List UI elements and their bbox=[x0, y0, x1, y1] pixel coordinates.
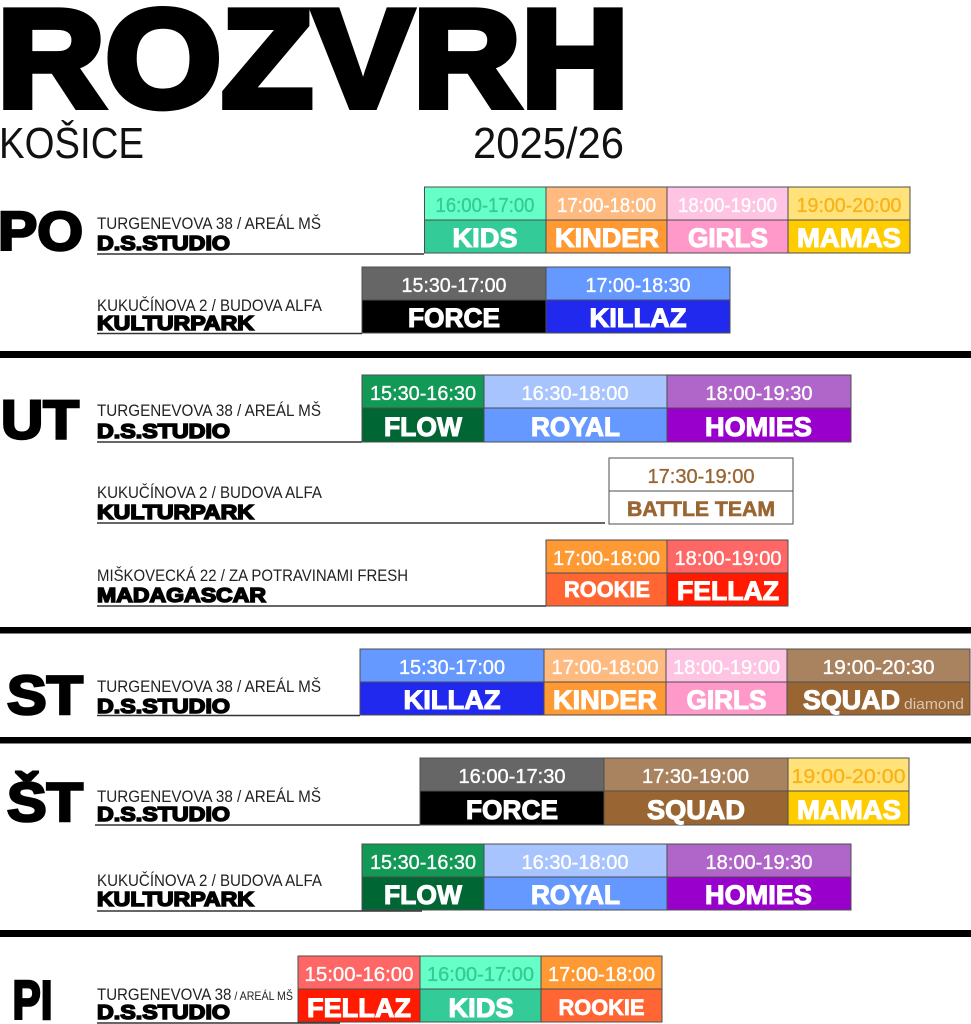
class row: D.S.Studio: 19:00-20:00 bbox=[796, 195, 902, 217]
class row: D.S.Studio: 17:00-18:00 bbox=[548, 964, 655, 986]
class row: D.S.Studio: MAMAS bbox=[797, 223, 901, 253]
panel: piatok bbox=[12, 956, 662, 1024]
class row: D.S.Studio: GIRLS bbox=[688, 223, 768, 253]
class row: D.S.Studio: KIDS bbox=[448, 993, 514, 1023]
panel: utorok bbox=[1, 375, 851, 607]
location: D.S.Studio: D.S.STUDIO bbox=[97, 804, 230, 826]
class row: D.S.Studio bbox=[360, 649, 970, 715]
class row: D.S.Studio: 16:00-17:30 bbox=[458, 766, 566, 788]
class row: D.S.Studio: KINDER bbox=[555, 223, 659, 253]
panel: pondelok bbox=[0, 187, 910, 335]
subtitle: city: KOŠICE bbox=[0, 118, 144, 168]
location: Kulturpark: KUKUČÍNOVA 2 / BUDOVA ALFA bbox=[97, 483, 323, 502]
location: Kulturpark: KULTURPARK bbox=[97, 313, 255, 335]
location: Kulturpark bbox=[97, 871, 422, 911]
class row: Kulturpark: FLOW bbox=[384, 880, 462, 910]
class row: Madagascar: 18:00-19:00 bbox=[674, 548, 782, 570]
class row: D.S.Studio: ROOKIE bbox=[558, 995, 644, 1020]
class row: Madagascar: 17:00-18:00 bbox=[553, 548, 660, 570]
location: Kulturpark bbox=[97, 296, 362, 335]
divider bbox=[0, 351, 971, 358]
location: D.S.Studio: D.S.STUDIO bbox=[97, 233, 230, 255]
class row: Madagascar bbox=[546, 540, 788, 606]
class row: D.S.Studio: 16:30-18:00 bbox=[522, 383, 628, 405]
location: D.S.Studio bbox=[95, 787, 420, 826]
class row: D.S.Studio bbox=[424, 187, 910, 253]
class row: D.S.Studio: 15:30-16:30 bbox=[370, 383, 476, 405]
location: D.S.Studio: TURGENEVOVA 38 / AREÁL MŠ bbox=[97, 401, 321, 420]
class row: D.S.Studio: 16:00-17:00 bbox=[427, 964, 534, 986]
class row: D.S.Studio: 19:00-20:30 bbox=[822, 657, 934, 679]
panel: stvrtok bbox=[7, 758, 909, 911]
location: Kulturpark: KUKUČÍNOVA 2 / BUDOVA ALFA bbox=[97, 296, 323, 315]
location: Kulturpark: KULTURPARK bbox=[97, 502, 255, 524]
class row: D.S.Studio: KILLAZ bbox=[404, 685, 500, 715]
class row: D.S.Studio: GIRLS bbox=[686, 685, 766, 715]
location: D.S.Studio: TURGENEVOVA 38 / AREÁL MŠ bbox=[97, 677, 321, 696]
class row: Kulturpark: 15:30-17:00 bbox=[402, 275, 506, 297]
class row: D.S.Studio bbox=[362, 375, 851, 442]
location: D.S.Studio: TURGENEVOVA 38 / AREÁL MŠ bbox=[97, 985, 293, 1004]
class: Battle Team: 17:30-19:00 bbox=[648, 466, 754, 488]
divider bbox=[0, 737, 971, 744]
day label PO: PO bbox=[0, 200, 83, 262]
location: D.S.Studio: D.S.STUDIO bbox=[97, 421, 230, 443]
class row: D.S.Studio: 18:00-19:30 bbox=[706, 383, 812, 405]
class row: D.S.Studio: FELLAZ bbox=[307, 993, 411, 1023]
class row: D.S.Studio: FORCE bbox=[466, 795, 558, 825]
class row: D.S.Studio: SQUAD bbox=[803, 685, 900, 715]
class row: D.S.Studio: ROYAL bbox=[531, 412, 620, 442]
location: D.S.Studio: D.S.STUDIO bbox=[97, 1002, 230, 1024]
location: D.S.Studio bbox=[97, 401, 362, 443]
location: D.S.Studio: D.S.STUDIO bbox=[97, 696, 230, 718]
location: D.S.Studio bbox=[97, 677, 360, 718]
location: Madagascar: MADAGASCAR bbox=[97, 585, 267, 607]
class row: D.S.Studio: 17:30-19:00 bbox=[642, 766, 749, 788]
class row: Kulturpark: 15:30-16:30 bbox=[370, 852, 476, 874]
class row: D.S.Studio: MAMAS bbox=[797, 795, 901, 825]
class row: Kulturpark: 16:30-18:00 bbox=[522, 852, 628, 874]
class row: D.S.Studio: FLOW bbox=[384, 412, 462, 442]
location: D.S.Studio: TURGENEVOVA 38 / AREÁL MŠ bbox=[97, 787, 321, 806]
location: Kulturpark: KUKUČÍNOVA 2 / BUDOVA ALFA bbox=[97, 871, 323, 890]
class row: Kulturpark: FORCE bbox=[408, 303, 500, 333]
class row: D.S.Studio: 16:00-17:00 bbox=[436, 195, 534, 217]
class row: D.S.Studio: diamond bbox=[904, 696, 964, 713]
class: Battle Team: BATTLE TEAM bbox=[627, 498, 775, 521]
location: D.S.Studio bbox=[97, 214, 424, 255]
class row: Kulturpark: ROYAL bbox=[531, 880, 620, 910]
class row: Kulturpark: HOMIES bbox=[705, 880, 812, 910]
class row: Kulturpark bbox=[362, 844, 851, 910]
class row: Kulturpark bbox=[362, 267, 730, 333]
class row: D.S.Studio: 17:00-18:00 bbox=[557, 195, 656, 217]
class row: D.S.Studio: 15:00-16:00 bbox=[304, 964, 414, 986]
class row: Kulturpark: KILLAZ bbox=[590, 303, 686, 333]
class row: D.S.Studio bbox=[420, 758, 909, 825]
location: Madagascar bbox=[97, 566, 546, 607]
location: Madagascar: MIŠKOVECKÁ 22 / ZA POTRAVINAMI FRESH bbox=[97, 566, 408, 585]
class row: D.S.Studio: 15:30-17:00 bbox=[399, 657, 505, 679]
class row: D.S.Studio: 19:00-20:00 bbox=[792, 766, 906, 788]
location: Kulturpark bbox=[97, 483, 605, 524]
day label ST: ST bbox=[7, 664, 83, 726]
subtitle: season: 2025/26 bbox=[473, 119, 624, 168]
class row: D.S.Studio: SQUAD bbox=[647, 795, 745, 825]
class row: Kulturpark: 18:00-19:30 bbox=[706, 852, 812, 874]
day label UT: UT bbox=[1, 388, 79, 450]
class row: D.S.Studio bbox=[298, 956, 662, 1023]
class row: D.S.Studio: 18:00-19:00 bbox=[678, 195, 777, 217]
location: D.S.Studio bbox=[97, 985, 340, 1024]
class row: D.S.Studio: HOMIES bbox=[705, 412, 812, 442]
divider bbox=[0, 627, 971, 634]
location: D.S.Studio: TURGENEVOVA 38 / AREÁL MŠ bbox=[97, 214, 321, 233]
class row: Madagascar: ROOKIE bbox=[564, 577, 650, 602]
divider bbox=[0, 930, 971, 937]
class row: D.S.Studio: KINDER bbox=[553, 685, 657, 715]
class row: Madagascar: FELLAZ bbox=[677, 576, 779, 606]
class row: D.S.Studio: 17:00-18:00 bbox=[552, 657, 658, 679]
day label ŠT: ŠT bbox=[7, 771, 83, 833]
location: Kulturpark: KULTURPARK bbox=[97, 889, 255, 911]
class row: Kulturpark: 17:00-18:30 bbox=[586, 275, 690, 297]
class: Battle Team bbox=[609, 458, 793, 524]
panel: streda bbox=[7, 649, 970, 726]
class row: D.S.Studio: KIDS bbox=[452, 223, 518, 253]
class row: D.S.Studio: 18:00-19:00 bbox=[673, 657, 780, 679]
